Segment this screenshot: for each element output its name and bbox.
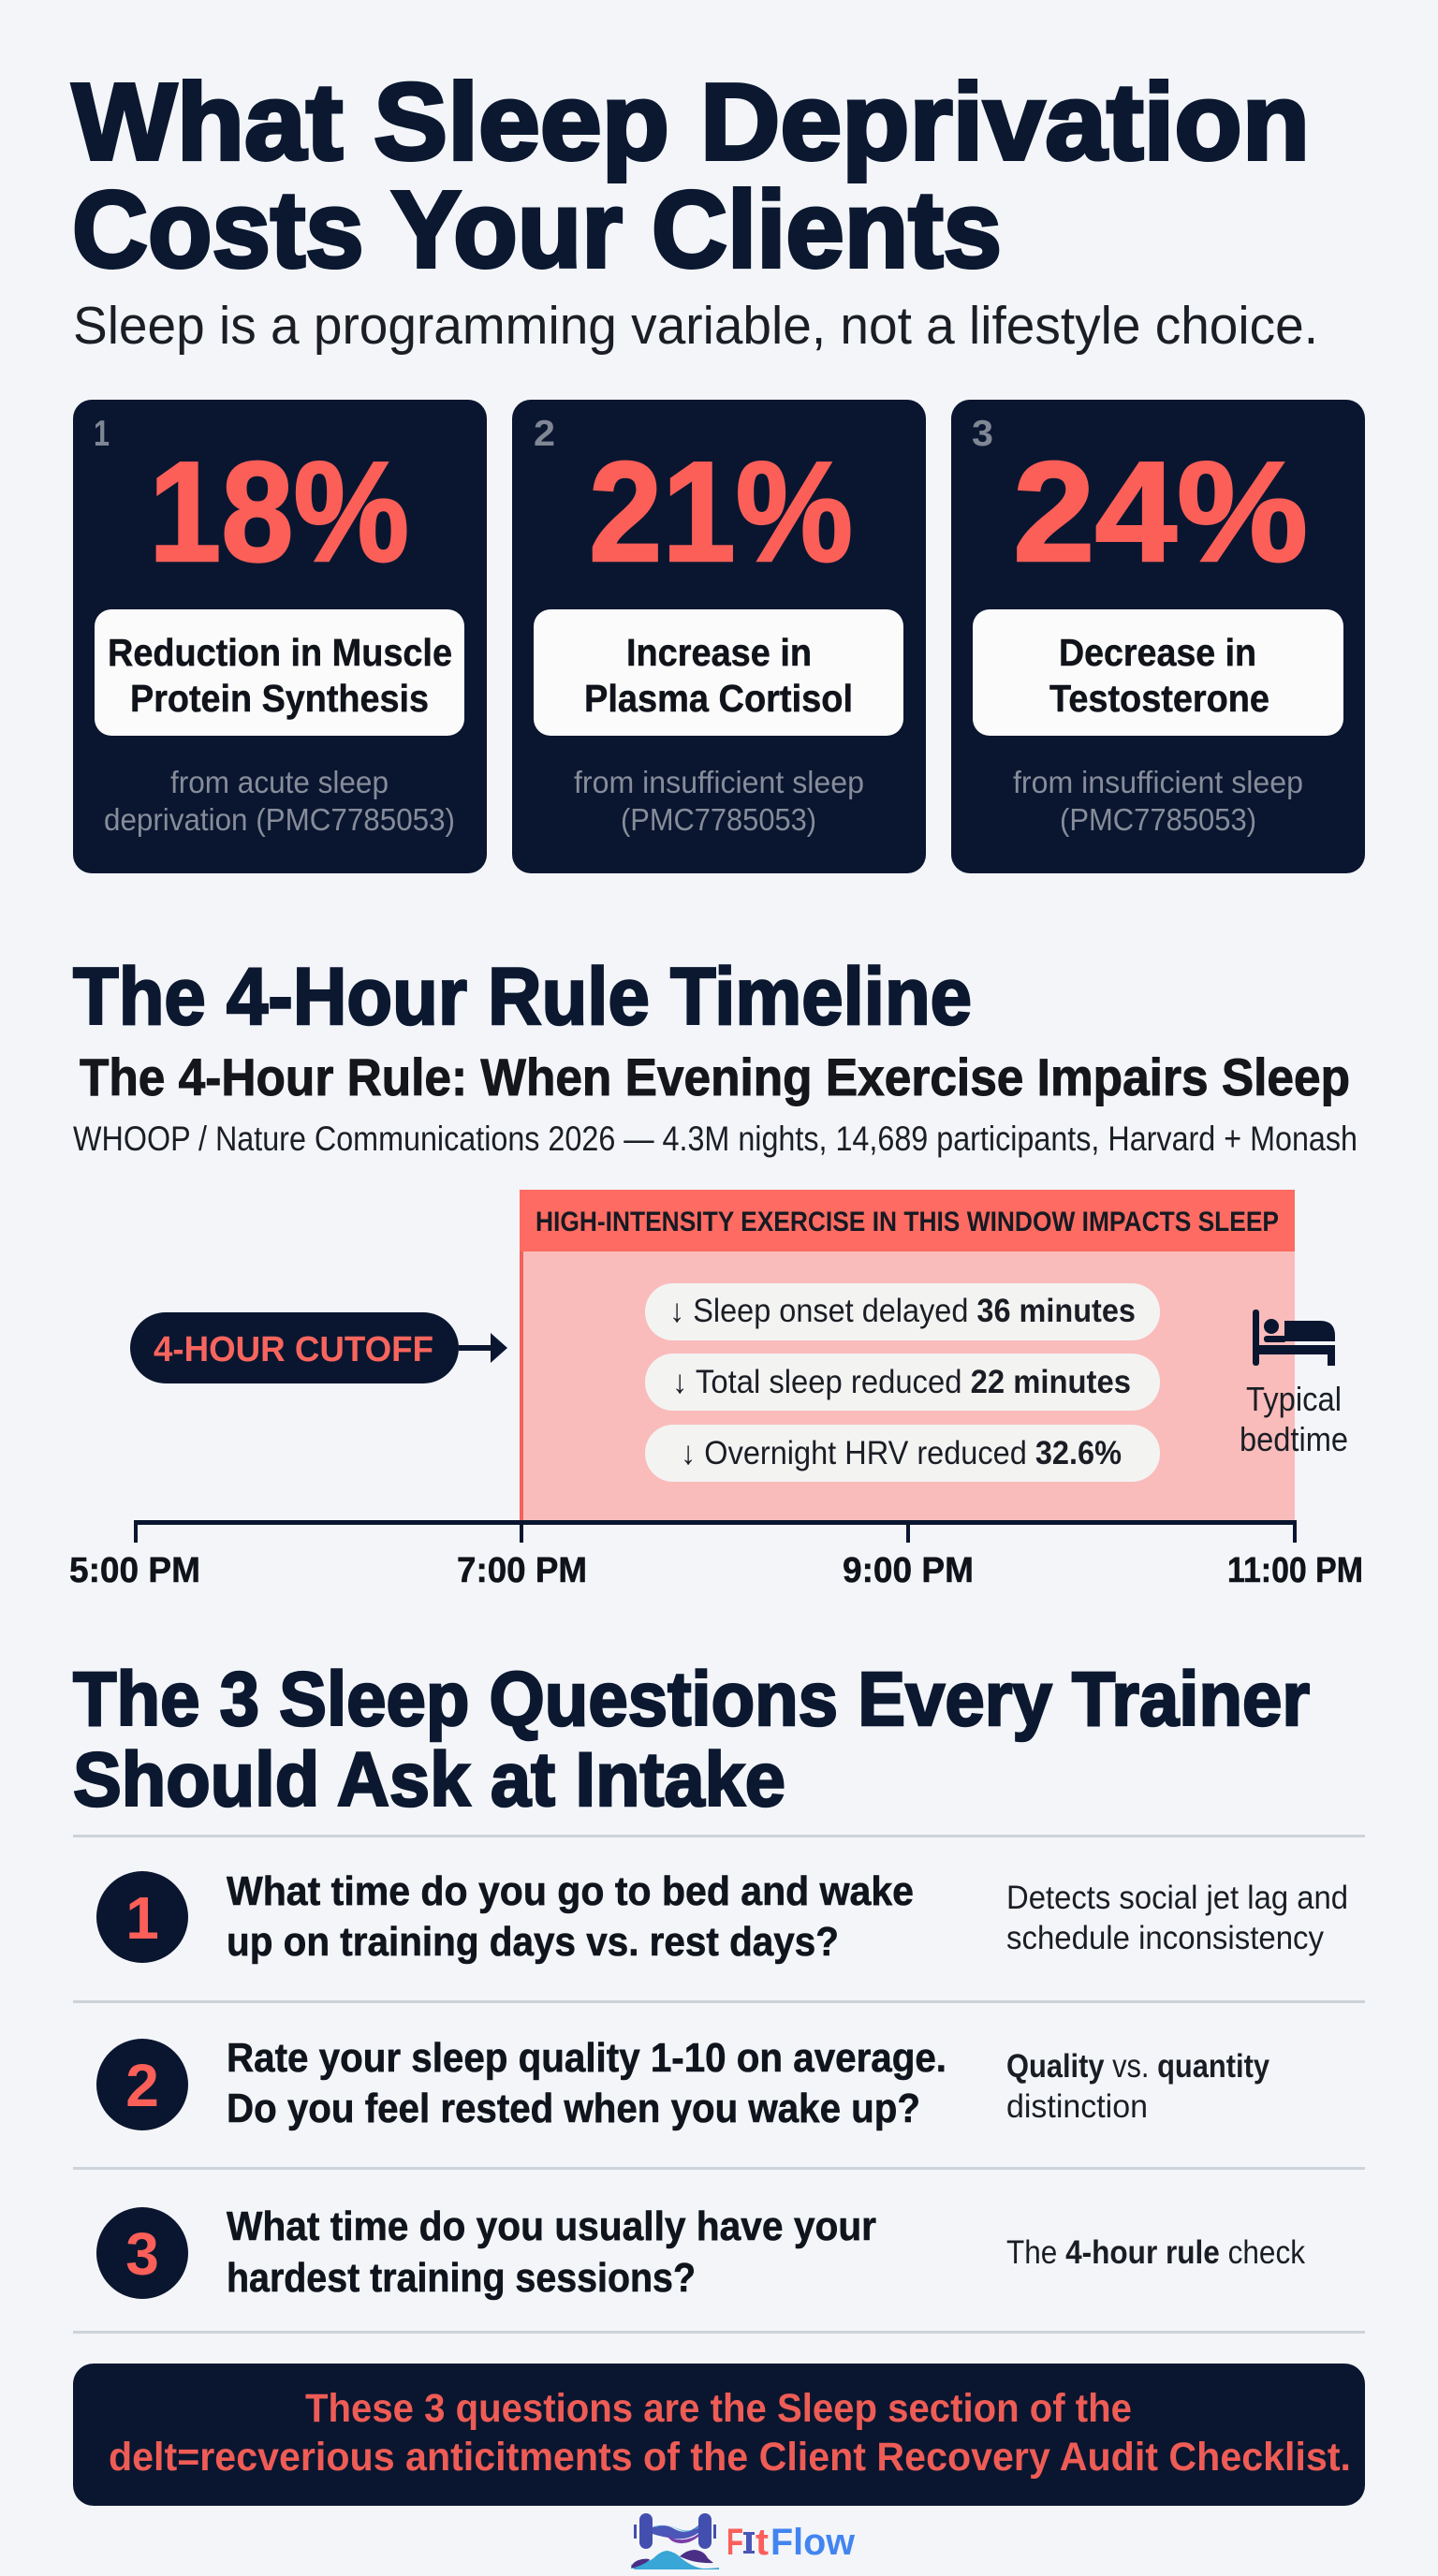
panel: stat card 1: 18% [149,432,409,592]
question row 3: What time do you usually have your [227,2203,876,2249]
question row 2: Do you feel rested when you wake up? [227,2086,920,2131]
panel: stat card 2: 2 [534,414,555,454]
panel: high-intensity window [520,1190,1295,1521]
panel: stat card 3: (PMC7785053) [1060,802,1256,837]
heading: questions section: Should Ask at Intake [73,1737,785,1822]
question row 3: hardest training sessions? [227,2255,696,2301]
panel: stat card 1: Reduction in Muscle [108,631,452,674]
panel: stat card 3: 24% [1013,432,1308,592]
panel: stat card 1: Protein Synthesis [130,677,429,720]
wordmark: F [726,2522,743,2563]
panel: stat card 2: from insufficient sleep [574,765,864,799]
question row 2: 2 [125,2052,159,2119]
effect pill: sleep onset: ↓ Sleep onset delayed 36 minutes [669,1293,1136,1329]
effect pill: overnight HRV: ↓ Overnight HRV reduced 32.6% [681,1435,1122,1471]
question row 3: 3 [125,2220,159,2288]
label: typical bedtime: bedtime [1240,1420,1348,1458]
arrow: cutoff to window [459,1333,507,1363]
logo: FitFlow [631,2513,856,2569]
panel: stat card 3: 3 [972,414,993,454]
question row 1: up on training days vs. rest days? [227,1919,839,1965]
wordmark: Flow [770,2522,856,2563]
panel: stat card 3 [951,400,1365,873]
panel: stat card 1: deprivation (PMC7785053) [104,802,455,837]
icon: bed [1253,1310,1335,1366]
question row 2: distinction [1006,2088,1148,2125]
question row 1 [96,1868,1348,1965]
question row 1: Detects social jet lag and [1006,1880,1348,1916]
icon: dumbbell and wave [631,2513,719,2569]
callout banner: delt=recverious anticitments of the Client Recovery Audit Checklist. [109,2435,1351,2480]
title: What Sleep Deprivation [72,61,1310,183]
panel: stat card 2: 21% [589,432,853,592]
time axis: 9:00 PM [843,1551,974,1590]
heading: questions section [73,1657,1310,1822]
question row 2: Quality vs. quantity [1006,2048,1269,2085]
subtitle: Sleep is a programming variable, not a lifestyle choice. [73,296,1318,356]
wordmark: t [756,2522,769,2563]
panel: stat card 2: Plasma Cortisol [584,677,853,720]
timeline chart [69,1190,1363,1590]
question row 2: Rate your sleep quality 1-10 on average. [227,2035,946,2081]
question row 1: What time do you go to bed and wake [227,1868,914,1914]
callout banner: These 3 questions are the Sleep section of the [305,2386,1132,2431]
panel: stat card 2: Increase in [626,631,812,674]
time axis: 5:00 PM [69,1551,200,1590]
panel: stat card 2 [512,400,926,873]
label: typical bedtime [1240,1380,1348,1458]
question row 3 [96,2203,1305,2301]
panel: stat card 3: Decrease in [1059,631,1256,674]
question row 1: schedule inconsistency [1006,1920,1324,1956]
effect pill: total sleep: ↓ Total sleep reduced 22 minutes [672,1364,1131,1400]
title: Costs Your Clients [72,168,1002,290]
effect pill: total sleep [645,1354,1160,1411]
panel: stat card 3: from insufficient sleep [1013,765,1303,799]
time axis [69,1520,1363,1590]
effect pill: overnight HRV [645,1425,1160,1482]
panel: stat card 1: 1 [94,414,110,454]
callout banner [73,2364,1365,2506]
heading: timeline section: The 4-Hour Rule Timeline [73,952,972,1042]
effect pill: sleep onset [645,1283,1160,1340]
panel: high-intensity window: HIGH-INTENSITY EXERCISE IN THIS WINDOW IMPACTS SLEEP [536,1207,1279,1237]
panel: stat card 1 [73,400,487,873]
question row 3: The 4-hour rule check [1006,2234,1305,2271]
heading: questions section: The 3 Sleep Questions Every Trainer [73,1657,1310,1742]
panel: stat card 2: (PMC7785053) [621,802,816,837]
panel: stat card 3: Testosterone [1049,677,1269,720]
question row 2 [96,2035,1269,2131]
wordmark [726,2522,856,2563]
time axis: 11:00 PM [1227,1551,1363,1590]
title [72,61,1310,290]
callout: 4-hour cutoff: 4-HOUR CUTOFF [154,1330,433,1369]
callout: 4-hour cutoff [130,1312,459,1383]
time axis: 7:00 PM [457,1551,587,1590]
question row 1: 1 [125,1884,159,1952]
label: typical bedtime: Typical [1246,1380,1342,1418]
heading: timeline subheading: The 4-Hour Rule: When Evening Exercise Impairs Sleep [80,1047,1350,1106]
panel: stat card 1: from acute sleep [170,765,389,799]
